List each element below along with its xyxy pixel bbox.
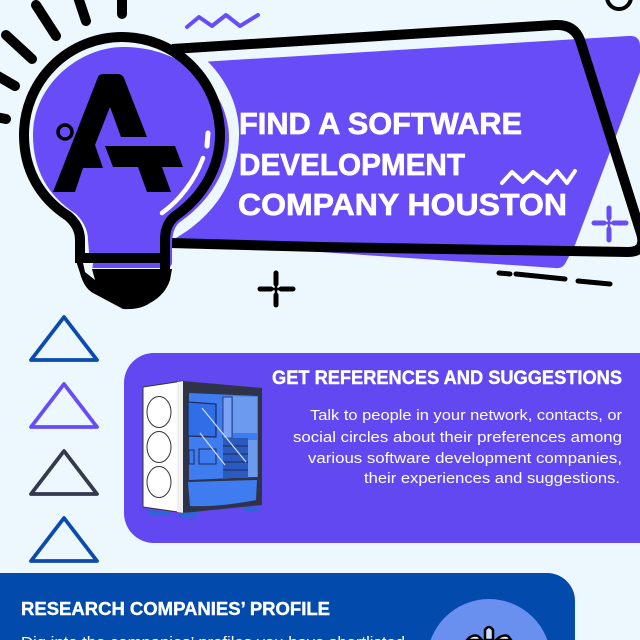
black plus [260, 273, 293, 305]
decorative rays [0, 0, 122, 119]
banner frame [170, 25, 640, 252]
body text: social circles about their preferences among [293, 429, 622, 446]
triangles [31, 317, 97, 561]
purple zigzag [187, 15, 258, 27]
white zigzag [502, 171, 575, 183]
purple plus [594, 208, 626, 240]
heading: GET REFERENCES AND SUGGESTIONS [272, 368, 622, 389]
icon: PC case [143, 381, 262, 517]
panel: references [124, 353, 640, 543]
title: FIND A SOFTWARE [239, 106, 522, 141]
title: COMPANY HOUSTON [238, 187, 567, 222]
body text: their experiences and suggestions. [364, 470, 620, 487]
title: DEVELOPMENT [239, 147, 465, 182]
decorative ring [607, 0, 631, 9]
bulb halo gap [100, 28, 239, 240]
dashes [499, 273, 610, 284]
heading: RESEARCH COMPANIES’ PROFILE [21, 598, 330, 619]
icon: hand on circle [427, 599, 551, 640]
panel: research [0, 573, 575, 640]
title [238, 106, 567, 222]
header purple banner [170, 36, 640, 268]
body text: various software development companies, [308, 450, 622, 467]
body text: Talk to people in your network, contacts, or [310, 407, 622, 424]
body text [293, 407, 622, 487]
lightbulb icon [24, 37, 229, 309]
logo A mark [53, 74, 183, 192]
